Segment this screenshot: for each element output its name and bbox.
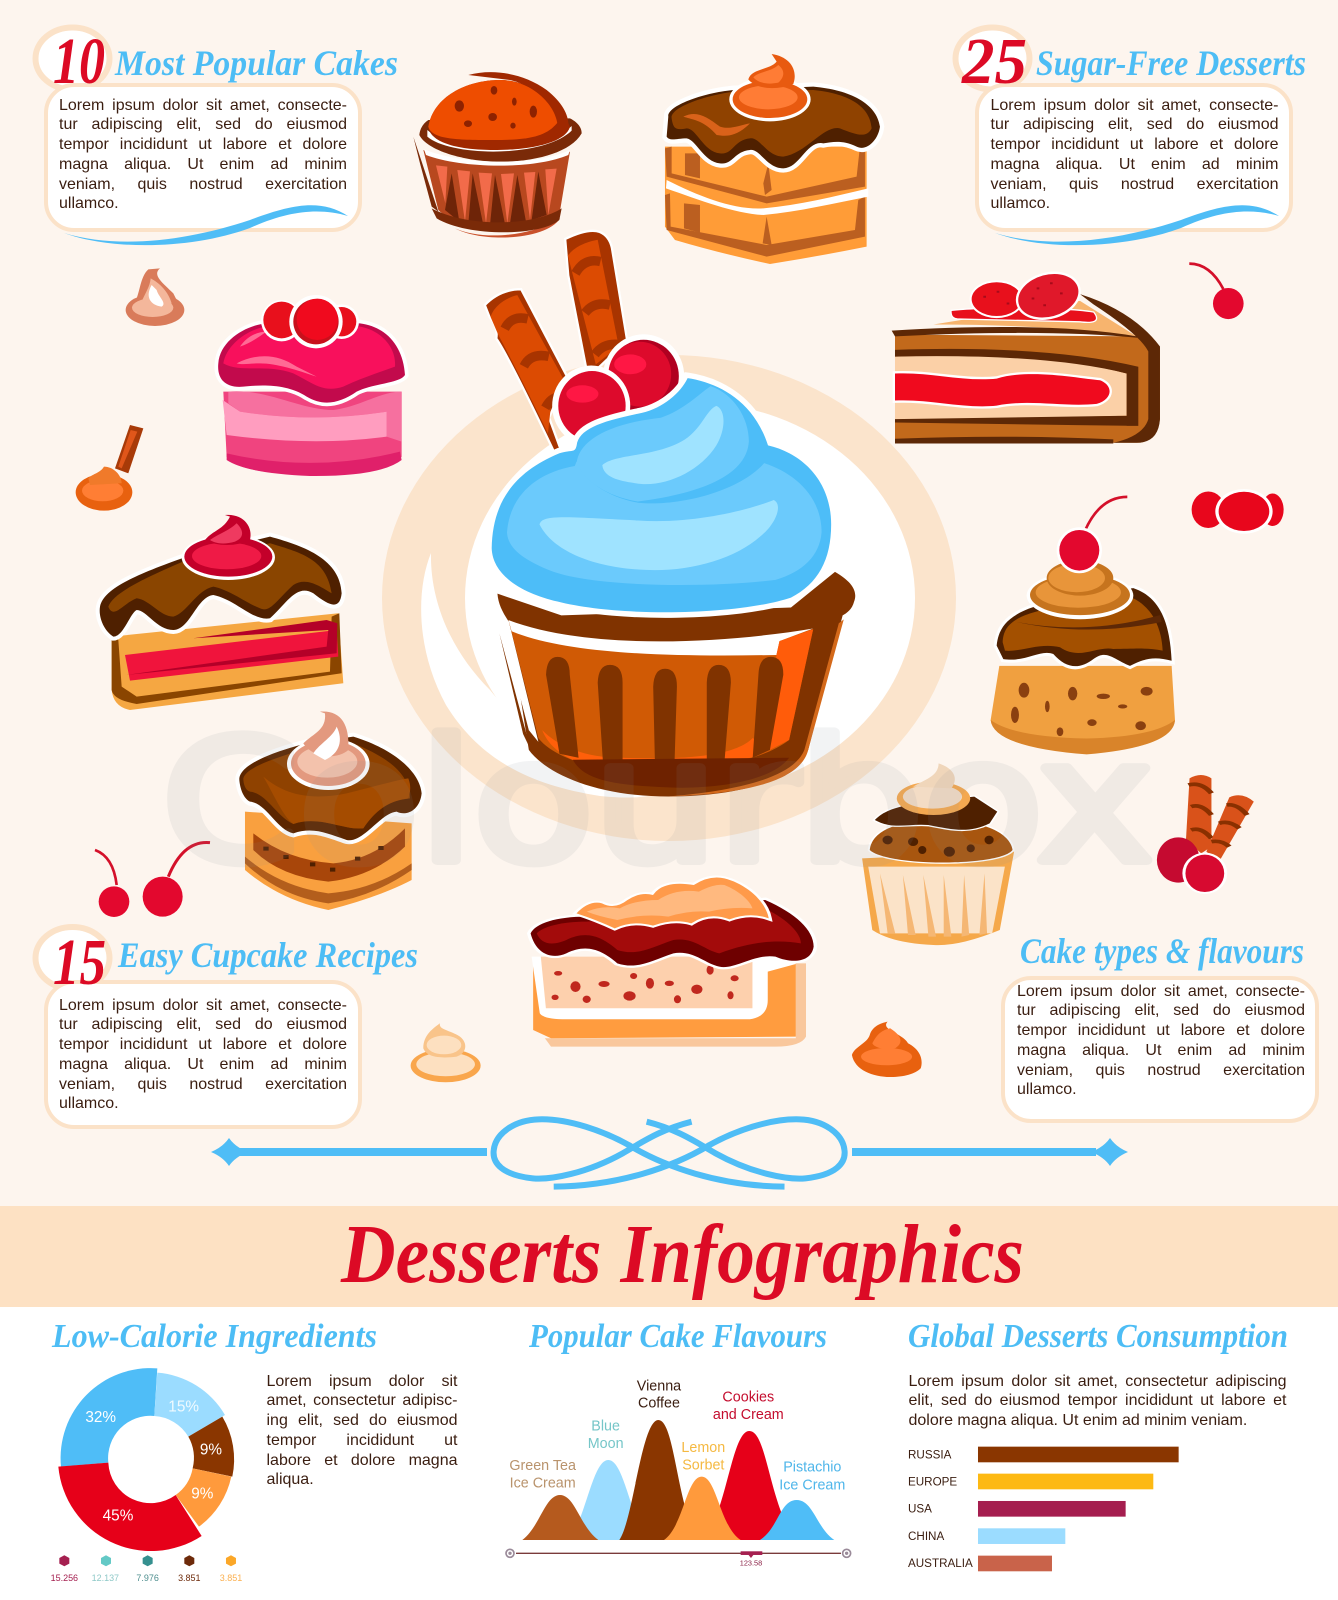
mountain chart: flavours: Ice Cream bbox=[510, 1475, 576, 1491]
text block: low-calorie ingredients: labore et dolore magna bbox=[266, 1452, 458, 1469]
panel: 15 Easy Cupcake Recipes: Easy Cupcake Recipes bbox=[117, 935, 418, 975]
text block: cake types and flavours: Lorem ipsum dolor sit amet, consecte- bbox=[1017, 982, 1305, 1000]
mountain chart: flavours: Coffee bbox=[638, 1396, 680, 1412]
text block: low-calorie ingredients: amet, consectetur adipisc- bbox=[266, 1392, 458, 1409]
mountain chart: flavours: Blue bbox=[591, 1419, 620, 1435]
mountain chart: flavours: Ice Cream bbox=[779, 1477, 845, 1493]
bar chart: global consumption: RUSSIA bbox=[908, 1449, 952, 1462]
text block: easy cupcake recipes: veniam, quis nostrud exercitation bbox=[59, 1076, 347, 1093]
panel: Cake types and flavours bbox=[1003, 931, 1317, 1121]
text block: easy cupcake recipes: tempor incididunt ut labore et dolore bbox=[59, 1036, 347, 1053]
chart legend: 12.137 bbox=[92, 1573, 119, 1583]
text block: cake types and flavours: veniam, quis nostrud exercitation bbox=[1017, 1062, 1305, 1079]
donut chart: 32% bbox=[85, 1409, 116, 1426]
heading: Popular Cake Flavours: Popular Cake Flavours bbox=[528, 1318, 827, 1355]
donut chart: 9% bbox=[200, 1442, 222, 1459]
icon: vanilla cream blob bbox=[411, 1023, 481, 1082]
text block: easy cupcake recipes bbox=[59, 996, 347, 1112]
text block: easy cupcake recipes: tur adipiscing elit, sed do eiusmod bbox=[59, 1016, 347, 1033]
text block: most popular cakes: Lorem ipsum dolor sit amet, consecte- bbox=[59, 96, 347, 114]
panel: 15 Easy Cupcake Recipes: 15 bbox=[53, 926, 106, 999]
text block: sugar-free desserts: magna aliqua. Ut enim ad minim bbox=[990, 156, 1278, 173]
chart legend bbox=[51, 1555, 242, 1583]
text block: low-calorie ingredients: tempor incididunt ut bbox=[266, 1432, 458, 1449]
mountain chart: flavours: Sorbet bbox=[682, 1457, 724, 1473]
icon: pink cake, small creams and chocolate slice bbox=[76, 268, 405, 710]
donut chart: 45% bbox=[103, 1507, 134, 1524]
icon: fruit pie, light cupcake, sticks with cherries, orange cream bbox=[531, 763, 1254, 1077]
mountain chart: flavours: Moon bbox=[588, 1436, 624, 1452]
text block: global desserts consumption bbox=[908, 1372, 1286, 1429]
panel: 25 Sugar-Free Desserts: 25 bbox=[961, 25, 1027, 98]
text block: low-calorie ingredients: ing elit, sed do eiusmod bbox=[266, 1412, 458, 1429]
plate behind the central cupcake bbox=[382, 355, 956, 841]
chart legend: 7.976 bbox=[136, 1573, 159, 1583]
mountain chart: flavours: Lemon bbox=[681, 1440, 725, 1456]
text block: sugar-free desserts: Lorem ipsum dolor sit amet, consecte- bbox=[990, 96, 1278, 114]
mountain chart: flavours: Green Tea bbox=[509, 1458, 576, 1474]
mountain chart: flavours: and Cream bbox=[713, 1407, 784, 1423]
text block: global desserts consumption: dolore magna aliqua. Ut enim ad minim veniam. bbox=[908, 1412, 1247, 1429]
text block: cake types and flavours: tur adipiscing elit, sed do eiusmod bbox=[1017, 1002, 1305, 1019]
text block: low-calorie ingredients: aliqua. bbox=[266, 1471, 314, 1488]
chart legend: 3.851 bbox=[220, 1573, 242, 1583]
text block: easy cupcake recipes: Lorem ipsum dolor sit amet, consecte- bbox=[59, 996, 347, 1014]
panel: Cake types and flavours: Cake types & flavours bbox=[1020, 931, 1304, 971]
text block: most popular cakes: ullamco. bbox=[59, 195, 119, 212]
text block: most popular cakes: veniam, quis nostrud exercitation bbox=[59, 176, 347, 193]
text block: low-calorie ingredients: Lorem ipsum dolor sit bbox=[266, 1372, 458, 1390]
mountain chart: flavours: Pistachio bbox=[783, 1460, 841, 1476]
text block: most popular cakes bbox=[59, 96, 347, 212]
mountain chart: flavours: Vienna bbox=[637, 1379, 681, 1395]
icon: chocolate muffin and layer cake bbox=[413, 54, 880, 264]
icon: central blue frosted cupcake bbox=[485, 231, 855, 796]
panel: 25 Sugar-Free Desserts: Sugar-Free Desserts bbox=[1036, 43, 1306, 83]
text block: most popular cakes: tur adipiscing elit, sed do eiusmod bbox=[59, 116, 347, 133]
icon: brown cake, cherries and cream blob bbox=[95, 712, 422, 917]
text block: sugar-free desserts bbox=[990, 96, 1278, 212]
bar chart: global consumption: USA bbox=[908, 1503, 932, 1516]
text block: sugar-free desserts: veniam, quis nostrud exercitation bbox=[990, 176, 1278, 193]
text block: most popular cakes: tempor incididunt ut labore et dolore bbox=[59, 136, 347, 153]
text block: most popular cakes: magna aliqua. Ut enim ad minim bbox=[59, 156, 347, 173]
text block: easy cupcake recipes: ullamco. bbox=[59, 1095, 119, 1112]
title: Desserts Infographics bbox=[340, 1208, 1024, 1301]
bar chart: global consumption: AUSTRALIA bbox=[908, 1557, 973, 1570]
heading: Low-Calorie Ingredients: Low-Calorie Ingredients bbox=[51, 1318, 377, 1355]
text block: sugar-free desserts: ullamco. bbox=[990, 195, 1050, 212]
panel: 10 Most Popular Cakes: Most Popular Cakes bbox=[114, 43, 398, 83]
chart legend: 3.851 bbox=[178, 1573, 201, 1583]
watermark: Colourbox bbox=[162, 704, 1153, 900]
text block: easy cupcake recipes: magna aliqua. Ut enim ad minim bbox=[59, 1056, 347, 1073]
icon: strawberry slice, cherries and caramel cake bbox=[892, 264, 1284, 754]
panel: 25 Sugar-Free Desserts bbox=[956, 25, 1306, 245]
bar chart: global consumption: EUROPE bbox=[908, 1475, 957, 1488]
slider: 123.58 bbox=[740, 1558, 762, 1567]
donut chart: 9% bbox=[191, 1486, 214, 1503]
panel: 10 Most Popular Cakes: 10 bbox=[53, 25, 105, 98]
text block: global desserts consumption: Lorem ipsum dolor sit amet, consectetur adipiscing bbox=[908, 1372, 1286, 1390]
divider ornament bbox=[211, 1119, 1128, 1187]
text block: cake types and flavours: tempor incididunt ut labore et dolore bbox=[1017, 1022, 1305, 1039]
text block: sugar-free desserts: tempor incididunt ut labore et dolore bbox=[990, 136, 1278, 153]
mountain chart: flavours bbox=[506, 1379, 851, 1567]
bar chart: global consumption: CHINA bbox=[908, 1530, 944, 1543]
mountain chart: flavours: Cookies bbox=[722, 1390, 774, 1406]
text block: sugar-free desserts: tur adipiscing elit, sed do eiusmod bbox=[990, 116, 1278, 133]
text block: low-calorie ingredients bbox=[266, 1372, 458, 1488]
text block: cake types and flavours: magna aliqua. Ut enim ad minim bbox=[1017, 1042, 1305, 1059]
bar chart: global consumption bbox=[908, 1447, 1179, 1571]
heading: Global Desserts Consumption: Global Desserts Consumption bbox=[908, 1318, 1288, 1355]
slider bbox=[506, 1549, 851, 1567]
donut chart: 15% bbox=[168, 1398, 199, 1415]
panel: 15 Easy Cupcake Recipes bbox=[36, 926, 418, 1127]
donut chart bbox=[51, 1368, 242, 1583]
chart legend: 15.256 bbox=[51, 1573, 78, 1583]
text block: cake types and flavours bbox=[1017, 982, 1305, 1098]
text block: cake types and flavours: ullamco. bbox=[1017, 1081, 1077, 1098]
panel: 10 Most Popular Cakes bbox=[36, 25, 398, 245]
text block: global desserts consumption: elit, sed do eiusmod tempor incididunt ut labore et bbox=[908, 1392, 1286, 1409]
